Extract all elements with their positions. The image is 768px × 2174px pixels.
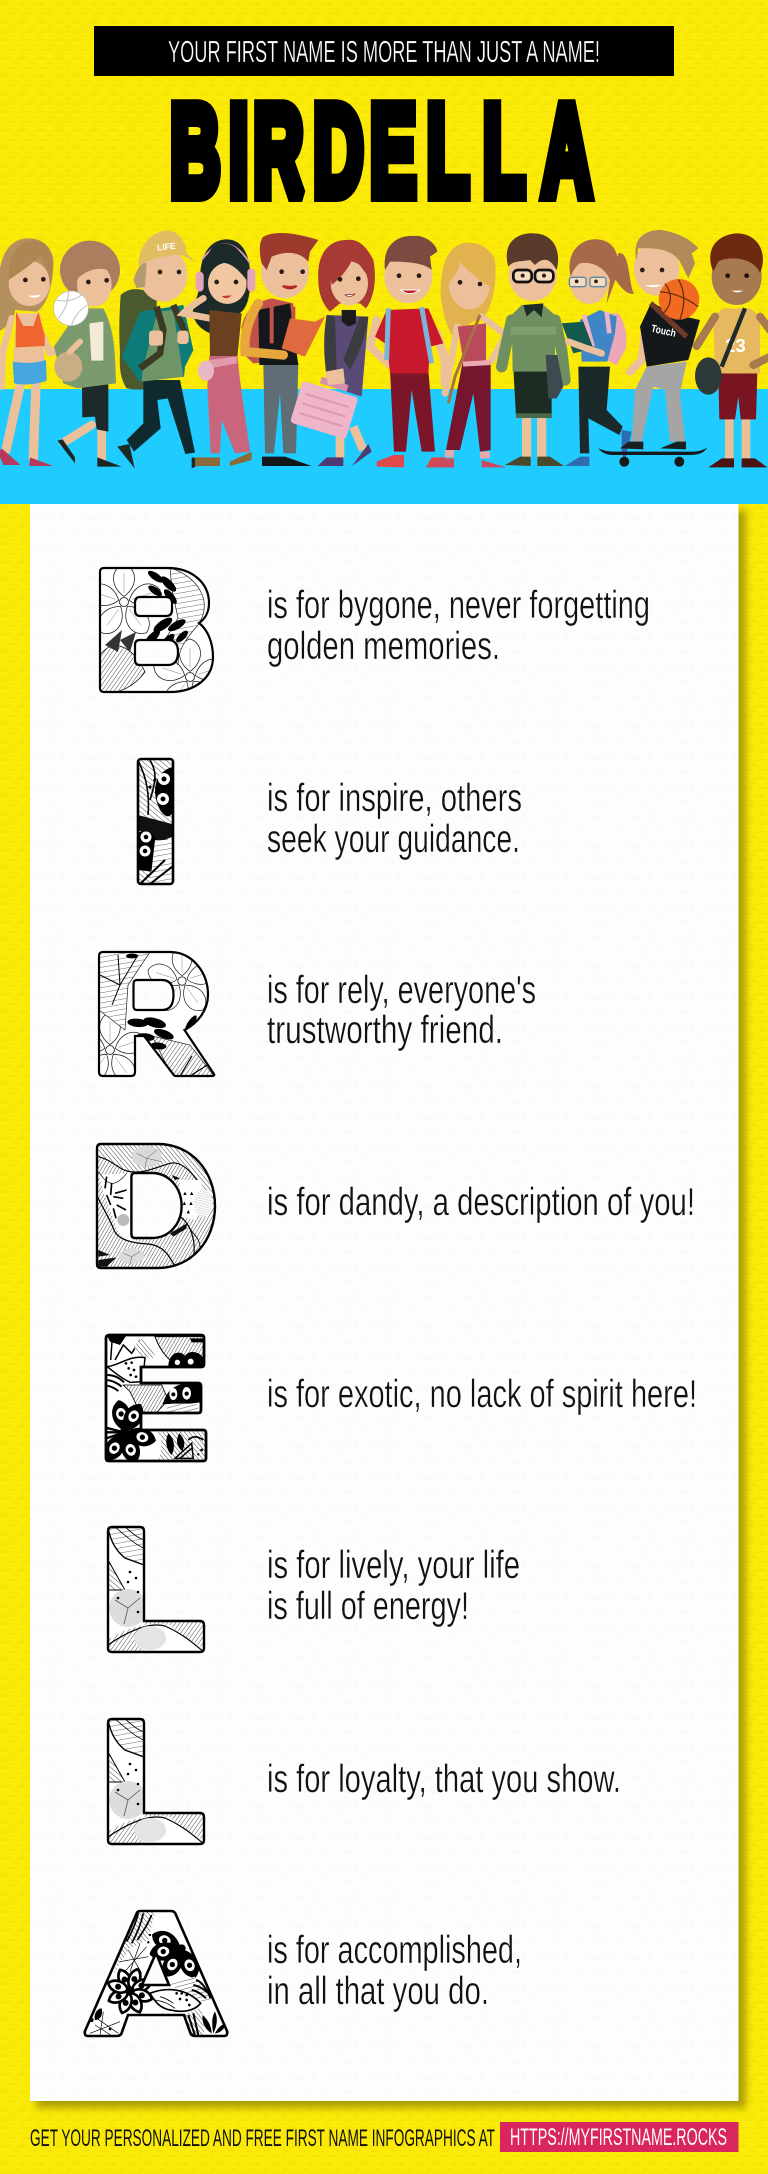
letter B mandala	[98, 566, 214, 694]
blue ground band	[0, 389, 768, 504]
text for I	[267, 777, 522, 861]
row: second letter L	[105, 1717, 621, 1847]
row: letter R	[98, 950, 535, 1078]
letter E mandala	[99, 1333, 210, 1466]
row: letter B	[98, 566, 648, 694]
text for B: golden memories.	[267, 625, 500, 668]
person 5: boy reading a book	[242, 233, 325, 466]
person 1: girl in orange top	[0, 238, 80, 466]
letter R mandala	[98, 950, 216, 1078]
person 11: skateboarder with basketball: Touch	[650, 323, 677, 340]
text for I: seek your guidance.	[267, 818, 520, 861]
name title: BIRDELLA	[170, 78, 592, 222]
person 3: boy with cap and hiking backpack: LIFE	[156, 241, 176, 253]
person 11: skateboarder with basketball	[598, 230, 707, 467]
illustration: row of twelve young people	[0, 230, 768, 468]
letter A mandala	[84, 1910, 228, 2038]
text for A: in all that you do.	[267, 1970, 489, 2013]
letter L mandala	[105, 1525, 207, 1655]
text for first L: is for lively, your life	[267, 1544, 520, 1587]
person 7: boy in red shirt with blue backpack	[370, 236, 454, 467]
letter L mandala	[105, 1717, 207, 1847]
text for I: is for inspire, others	[267, 777, 522, 820]
person 8: blonde girl	[425, 243, 506, 467]
person 12: boy in yellow vest with shoulder bag	[695, 233, 768, 467]
row: first letter L	[105, 1525, 520, 1655]
row: letter A	[80, 1905, 522, 2040]
person 10: ponytail girl with tablet	[562, 239, 634, 466]
person 6: red-haired girl with pink case	[290, 240, 375, 466]
text for B: is for bygone, never forgetting	[267, 584, 650, 627]
text for first L	[267, 1544, 520, 1628]
text for A	[267, 1929, 522, 2013]
text for B	[267, 584, 650, 668]
row: letter I	[136, 757, 522, 887]
person 12: boy in yellow vest with shoulder bag: 23	[725, 335, 746, 356]
text for R	[267, 969, 536, 1052]
text for R: trustworthy friend.	[267, 1009, 503, 1052]
text for R: is for rely, everyone's	[267, 969, 536, 1012]
letter D mandala	[96, 1142, 216, 1270]
text for A: is for accomplished,	[267, 1929, 522, 1972]
white card panel with drop shadow	[30, 504, 746, 2108]
row: letter D	[90, 1140, 695, 1275]
person 2: girl in green jacket with volleyball	[54, 241, 122, 467]
letter I mandala	[136, 757, 176, 887]
person 4: girl with headphones and pink trousers	[183, 239, 255, 466]
text for second L: is for loyalty, that you show.	[267, 1758, 621, 1801]
text for first L: is full of energy!	[267, 1585, 469, 1628]
row: letter E	[99, 1333, 697, 1466]
person 9: boy in glasses and green sweater	[502, 233, 565, 466]
person 3: boy with cap and hiking backpack	[117, 231, 208, 468]
tagline banner	[94, 26, 674, 76]
